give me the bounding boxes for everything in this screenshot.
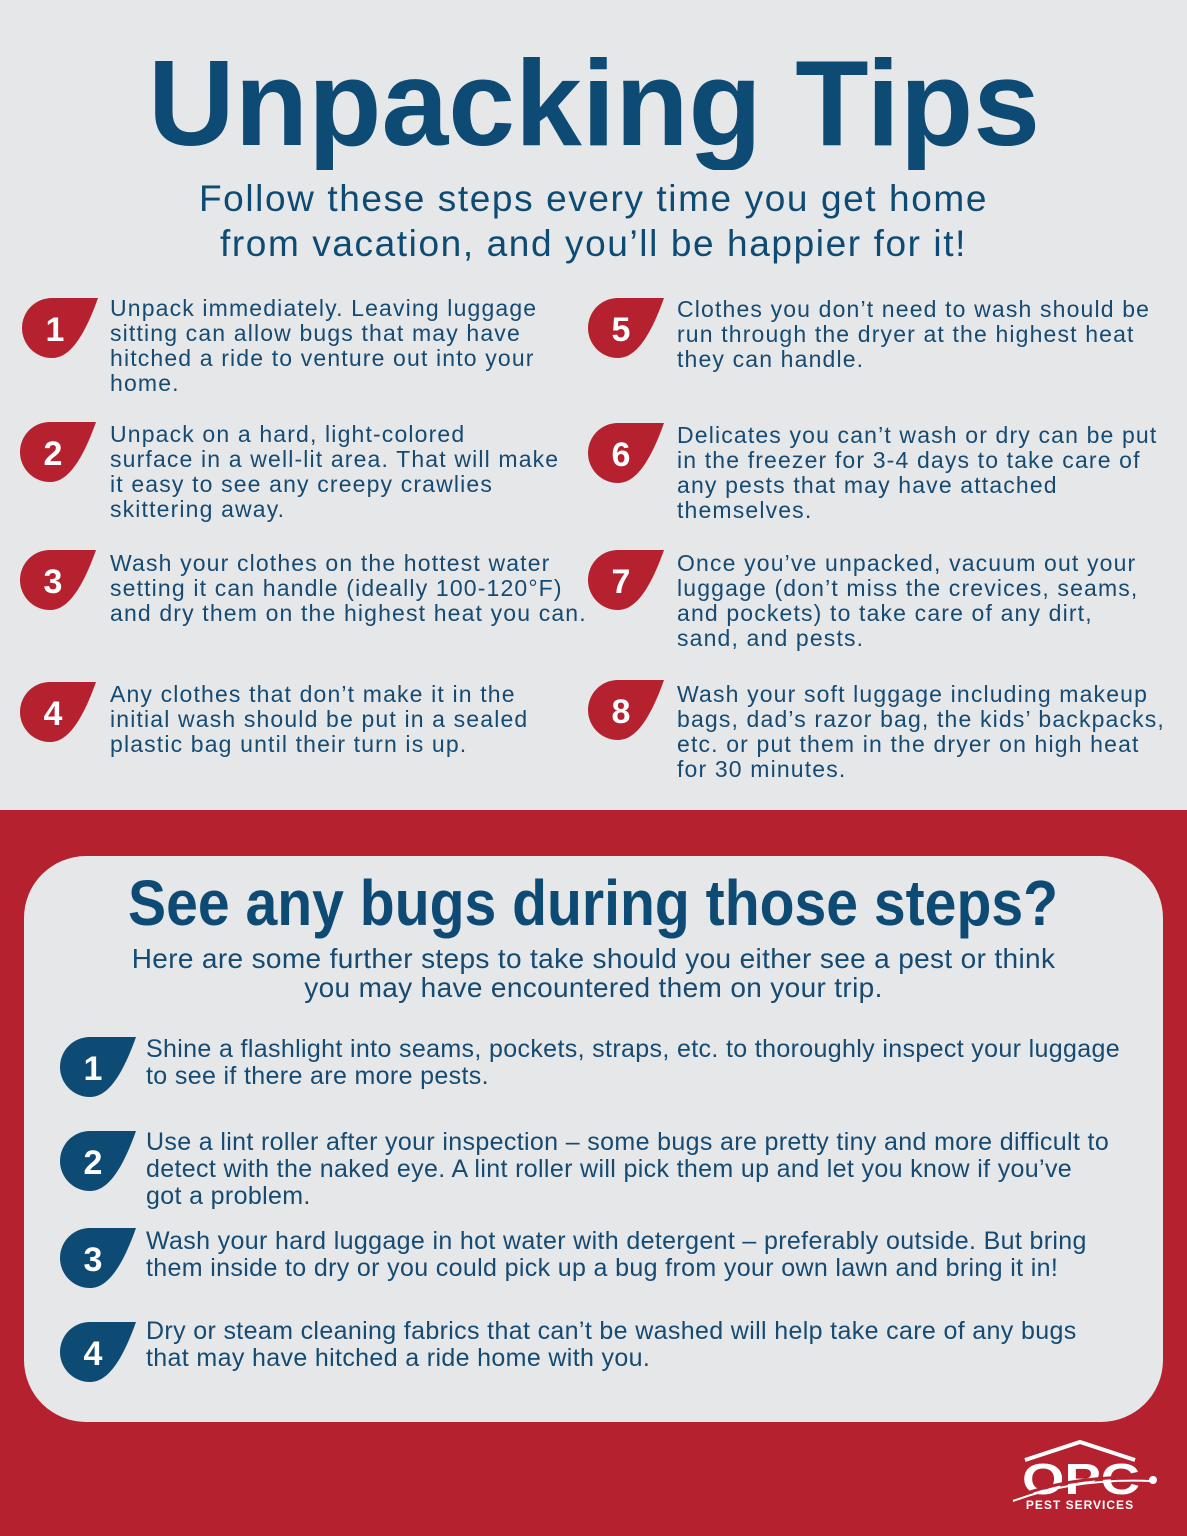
- step list: top: 4: [44, 695, 63, 733]
- step list: top: themselves.: [677, 497, 812, 523]
- step list: top: and pockets) to take care of any dirt,: [677, 600, 1093, 626]
- step list: top: run through the dryer at the highest heat: [677, 321, 1135, 347]
- step list: top: bags, dad’s razor bag, the kids’ backpacks,: [677, 706, 1165, 732]
- panel: bugs: 4: [84, 1335, 103, 1373]
- step list: top: any pests that may have attached: [677, 472, 1058, 498]
- red section: [0, 810, 1187, 1536]
- panel: bugs: got a problem.: [146, 1182, 311, 1210]
- step 2: [20, 421, 559, 522]
- step list: top: sand, and pests.: [677, 625, 864, 651]
- bug step 2: [60, 1128, 1109, 1210]
- step list: top: sitting can allow bugs that may have: [110, 320, 521, 346]
- panel: bugs: Use a lint roller after your inspection – some bugs are pretty tiny and more difficult to: [146, 1128, 1109, 1156]
- step 7: [588, 550, 1138, 651]
- subheading: you may have encountered them on your trip.: [304, 972, 883, 1003]
- bug step 1: [60, 1035, 1120, 1097]
- step 6: [588, 422, 1157, 523]
- step list: top: home.: [110, 370, 180, 396]
- step list: top: Wash your soft luggage including makeup: [677, 681, 1148, 707]
- step list: top: 2: [44, 435, 62, 473]
- panel: bugs: Dry or steam cleaning fabrics that can’t be washed will help take care of any bugs: [146, 1317, 1077, 1345]
- step list: top: [20, 295, 1165, 782]
- step 5: [588, 296, 1150, 372]
- panel: bugs: 2: [84, 1144, 102, 1182]
- step list: top: 6: [612, 436, 630, 474]
- step 1: [22, 295, 537, 396]
- step list: top: skittering away.: [110, 496, 285, 522]
- step list: top: Delicates you can’t wash or dry can be put: [677, 422, 1157, 448]
- title: Unpacking Tips: [148, 35, 1040, 170]
- step 4: [20, 681, 528, 757]
- step list: top: etc. or put them in the dryer on high heat: [677, 731, 1140, 757]
- heading: See any bugs during those steps?: [128, 867, 1058, 939]
- step list: top: surface in a well-lit area. That will make: [110, 446, 559, 472]
- step list: top: Wash your clothes on the hottest water: [110, 550, 550, 576]
- logo: [1012, 1440, 1157, 1512]
- subtitle: from vacation, and you’ll be happier for it!: [220, 223, 967, 264]
- step list: top: 5: [612, 311, 630, 349]
- panel: bugs: that may have hitched a ride home with you.: [146, 1344, 650, 1372]
- step list: top: and dry them on the highest heat you can.: [110, 600, 587, 626]
- panel: bugs: Shine a flashlight into seams, pockets, straps, etc. to thoroughly inspect your luggage: [146, 1035, 1120, 1063]
- subheading: Here are some further steps to take should you either see a pest or think: [132, 943, 1055, 974]
- logo: PEST SERVICES: [1026, 1498, 1134, 1512]
- step list: top: 3: [44, 563, 62, 601]
- bug step 3: [60, 1227, 1087, 1288]
- panel: bugs: 1: [84, 1050, 102, 1088]
- step list: top: Once you’ve unpacked, vacuum out your: [677, 550, 1136, 576]
- step list: top: initial wash should be put in a sealed: [110, 706, 528, 732]
- panel: bugs: [24, 856, 1163, 1422]
- step 3: [20, 550, 587, 626]
- logo: OPC: [1022, 1455, 1140, 1504]
- subtitle: Follow these steps every time you get home: [199, 178, 988, 219]
- panel: bugs: Wash your hard luggage in hot water with detergent – preferably outside. But bring: [146, 1227, 1087, 1255]
- step list: top: Unpack on a hard, light-colored: [110, 421, 465, 447]
- step list: top: for 30 minutes.: [677, 756, 846, 782]
- panel: bugs: detect with the naked eye. A lint roller will pick them up and let you know if you’ve: [146, 1155, 1072, 1183]
- step list: top: hitched a ride to venture out into your: [110, 345, 535, 371]
- step list: top: setting it can handle (ideally 100-120°F): [110, 575, 563, 601]
- step list: top: they can handle.: [677, 346, 864, 372]
- subheading: [132, 943, 1055, 1003]
- panel: bugs: to see if there are more pests.: [146, 1062, 489, 1090]
- step list: top: 1: [46, 311, 64, 349]
- step list: top: 7: [612, 563, 630, 601]
- step 8: [588, 680, 1165, 782]
- step list: top: Clothes you don’t need to wash should be: [677, 296, 1150, 322]
- step list: top: 8: [612, 693, 630, 731]
- panel: bugs: them inside to dry or you could pick up a bug from your own lawn and bring it in!: [146, 1254, 1058, 1282]
- panel: bugs: 3: [84, 1241, 102, 1279]
- step list: top: in the freezer for 3-4 days to take care of: [677, 447, 1141, 473]
- bug step 4: [60, 1317, 1077, 1382]
- step list: top: it easy to see any creepy crawlies: [110, 471, 493, 497]
- step list: top: plastic bag until their turn is up.: [110, 731, 467, 757]
- step list: top: Any clothes that don’t make it in the: [110, 681, 516, 707]
- step list: top: Unpack immediately. Leaving luggage: [110, 295, 537, 321]
- step list: top: luggage (don’t miss the crevices, seams,: [677, 575, 1138, 601]
- subtitle: [199, 178, 988, 264]
